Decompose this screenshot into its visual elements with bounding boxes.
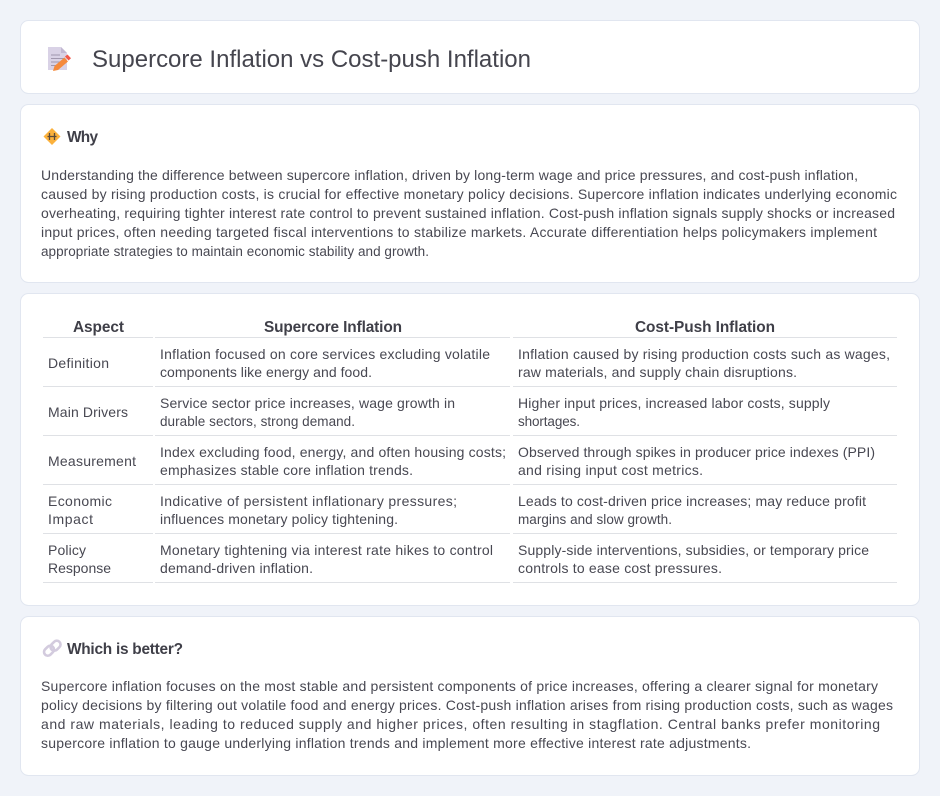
table header row [73, 319, 775, 336]
text block: why: Understanding the difference between supercore inflation, driven by long-term wage and price pressures, and cost-push inflation, [41, 167, 858, 183]
row: economic impact: margins and slow growth. [518, 512, 672, 527]
row: policy response: Monetary tightening via interest rate hikes to control [160, 542, 493, 558]
row: main drivers: Higher input prices, increased labor costs, supply [518, 395, 830, 411]
row: main drivers: Service sector price increases, wage growth in [160, 395, 455, 411]
table header row: Cost-Push Inflation [635, 319, 775, 336]
row: economic impact: Indicative of persistent inflationary pressures; [160, 493, 457, 509]
heading: which is better: Which is better? [67, 641, 183, 658]
row: policy response: demand-driven inflation. [160, 560, 313, 576]
text block: which is better: and raw materials, leading to reduced supply and higher prices, often resulting in stagflation. Central banks prefer monitoring [41, 716, 880, 732]
row: measurement: Index excluding food, energy, and often housing costs; [160, 444, 506, 460]
row: policy response [48, 542, 869, 576]
icon: road sign diamond [44, 128, 60, 145]
text block: why: overheating, requiring tighter interest rate control to prevent sustained inflation. Cost-push inflation signals supply shocks or increased [41, 205, 895, 221]
row: policy response: Supply-side interventions, subsidies, or temporary price [518, 542, 869, 558]
panel: comparison table [20, 294, 920, 606]
table header row: Aspect [73, 319, 124, 336]
row: main drivers: Main Drivers [48, 404, 128, 420]
row: policy response: Response [48, 560, 111, 576]
panel: header [20, 20, 920, 94]
table header row: Supercore Inflation [264, 319, 402, 336]
row: policy response: Policy [48, 542, 86, 558]
row: policy response: controls to ease cost pressures. [518, 560, 722, 576]
text block: why: caused by rising production costs, is crucial for effective monetary policy decisions. Supercore inflation indicates underlying economic [41, 186, 897, 202]
row: main drivers: shortages. [518, 414, 580, 429]
text block: why: input prices, often needing targeted fiscal interventions to stabilize markets. Accurate differentiation helps policymakers implement [41, 224, 877, 240]
panel: why [20, 104, 920, 282]
row: economic impact: Leads to cost-driven price increases; may reduce profit [518, 493, 866, 509]
text block: why [41, 167, 897, 259]
text block: which is better: supercore inflation to gauge underlying inflation trends and implement more effective interest rate adjustments. [41, 735, 751, 751]
row: measurement: Measurement [48, 453, 136, 469]
icon: link [42, 639, 62, 657]
text block: which is better [41, 678, 893, 751]
row: main drivers: durable sectors, strong demand. [160, 414, 355, 429]
row: definition: components like energy and food. [160, 364, 372, 380]
row: definition: Definition [48, 355, 109, 371]
row: measurement: Observed through spikes in producer price indexes (PPI) [518, 444, 875, 460]
text block: which is better: policy decisions by filtering out volatile food and energy prices. Cost-push inflation arises from rising production costs, such as wages [41, 697, 893, 713]
row: economic impact: influences monetary policy tightening. [160, 511, 398, 527]
row: definition: Inflation focused on core services excluding volatile [160, 346, 490, 362]
title: Supercore Inflation vs Cost-push Inflation [92, 46, 531, 73]
text block: which is better: Supercore inflation focuses on the most stable and persistent components of price increases, offering a clearer signal for monetary [41, 678, 878, 694]
row: definition: Inflation caused by rising production costs such as wages, [518, 346, 890, 362]
icon: document with pencil [48, 47, 71, 71]
row: definition: raw materials, and supply chain disruptions. [518, 364, 797, 380]
row: definition [48, 346, 890, 380]
row: main drivers [48, 395, 830, 429]
row: measurement [48, 444, 875, 478]
row: economic impact: Economic [48, 493, 112, 509]
row: measurement: and rising input cost metrics. [518, 462, 703, 478]
text block: why: appropriate strategies to maintain economic stability and growth. [41, 244, 429, 259]
heading: why: Why [67, 129, 98, 146]
row: economic impact: Impact [48, 511, 93, 527]
panel: which is better [20, 616, 920, 776]
row: economic impact [48, 493, 866, 527]
row: measurement: emphasizes stable core inflation trends. [160, 462, 413, 478]
